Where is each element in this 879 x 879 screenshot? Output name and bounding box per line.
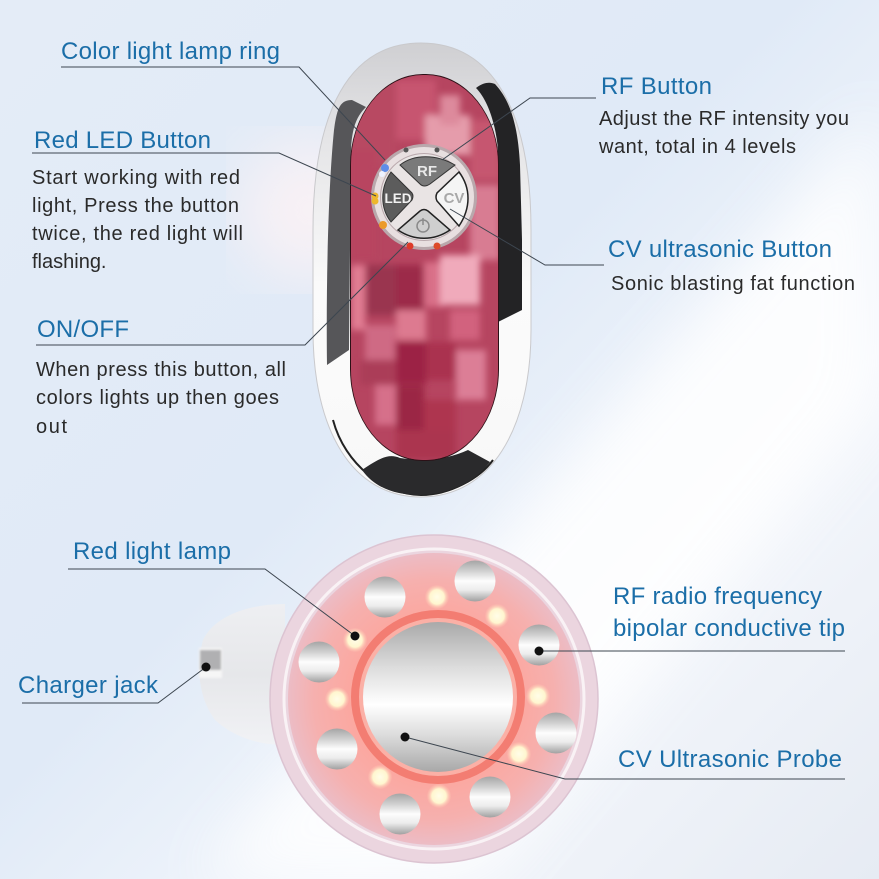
callout: RF Button: Adjust the RF intensity you (599, 108, 849, 130)
label: Color light lamp ring: Color light lamp ring (61, 38, 280, 65)
CV ultrasonic probe (363, 622, 513, 772)
charger jack (199, 648, 222, 678)
callout: Red LED Button: Start working with red (32, 167, 240, 189)
label: CV Ultrasonic Probe: CV Ultrasonic Probe (618, 746, 842, 773)
inner pink disc (288, 553, 580, 845)
outer disc (270, 535, 598, 863)
indicator lights (372, 148, 440, 250)
callout: CV ultrasonic Button: CV ultrasonic Button (608, 236, 832, 263)
red ring (355, 614, 521, 780)
callout: ON/OFF: ON/OFF (37, 316, 129, 343)
callout: ON/OFF (36, 316, 286, 438)
callout: RF Button: RF Button (601, 73, 712, 100)
label: RF radio frequency bipolar conductive tip: bipolar conductive tip (613, 615, 845, 642)
callout: CV ultrasonic Button (608, 236, 855, 295)
callout: RF Button (598, 73, 849, 158)
handle (199, 604, 285, 745)
button: power (398, 210, 450, 238)
callout: Red LED Button: light, Press the button (32, 195, 239, 217)
callout: ON/OFF: out (36, 416, 67, 438)
product: device head view (199, 535, 598, 863)
shell black lower edge (333, 420, 493, 495)
callout: ON/OFF: When press this button, all (36, 359, 286, 381)
callout: CV ultrasonic Button: Sonic blasting fat function (611, 273, 855, 295)
callout: Red LED Button: twice, the red light will (32, 223, 243, 245)
red light LEDs (325, 585, 550, 808)
callout: Red LED Button: flashing. (32, 251, 106, 273)
leader lines (22, 67, 845, 779)
label: RF radio frequency bipolar conductive tip: RF radio frequency (613, 583, 822, 610)
label: Charger jack: Charger jack (18, 672, 159, 699)
button: CV: CV (444, 190, 464, 207)
red faceted panel (350, 74, 500, 461)
button cluster (371, 144, 477, 250)
label: Red light lamp: Red light lamp (73, 538, 231, 565)
callout: ON/OFF: colors lights up then goes (36, 387, 279, 409)
label: RF radio frequency bipolar conductive tip (613, 583, 845, 642)
device shell (313, 43, 531, 497)
shell dark side trims (327, 83, 522, 495)
button: LED: LED (384, 191, 412, 206)
callout: Red LED Button: Red LED Button (34, 127, 211, 154)
product: device top view (313, 43, 531, 497)
callout: Red LED Button (32, 127, 243, 273)
button: RF: RF (417, 163, 437, 180)
RF electrodes (298, 560, 576, 834)
callout: RF Button: want, total in 4 levels (598, 136, 796, 158)
